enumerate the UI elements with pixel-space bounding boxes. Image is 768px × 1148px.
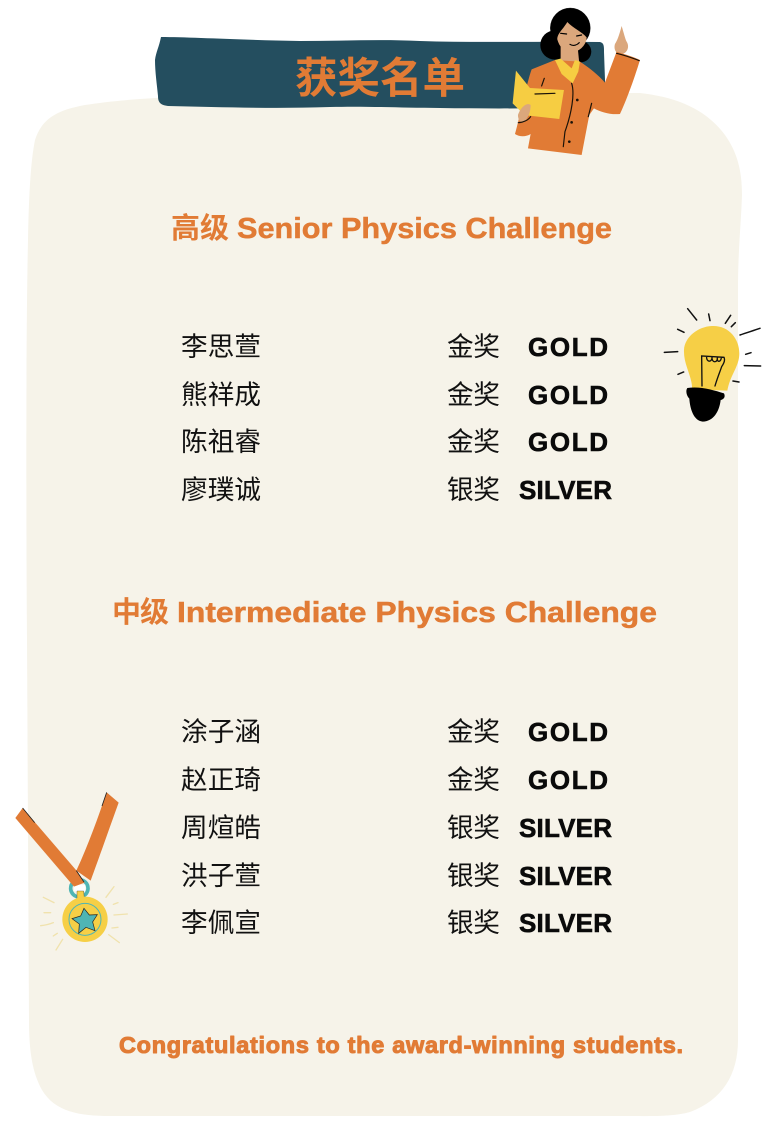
heading: award list: 获奖名单 bbox=[295, 56, 465, 103]
intermediate list awards: SILVER bbox=[519, 908, 612, 938]
heading: intermediate: 中级 bbox=[112, 596, 169, 629]
intermediate list awards: 银奖 bbox=[447, 861, 500, 891]
heading: intermediate: Intermediate Physics Challenge bbox=[177, 597, 657, 629]
senior list names: 李思萱 bbox=[181, 332, 261, 362]
icon: medal bbox=[15, 792, 127, 950]
senior list awards: GOLD bbox=[528, 380, 608, 410]
intermediate list names: 周煊皓 bbox=[181, 813, 261, 843]
intermediate list awards: SILVER bbox=[519, 813, 612, 843]
intermediate list awards: 金奖 bbox=[447, 765, 500, 795]
intermediate list awards: GOLD bbox=[528, 717, 608, 747]
intermediate list awards: 银奖 bbox=[447, 908, 500, 938]
intermediate list names: 洪子萱 bbox=[181, 861, 261, 891]
icon: teacher holding book bbox=[513, 8, 640, 155]
congratulations message: Congratulations to the award-winning students. bbox=[119, 1032, 683, 1058]
senior list awards: 银奖 bbox=[447, 475, 500, 505]
intermediate list names: 涂子涵 bbox=[181, 717, 261, 747]
intermediate list awards: 银奖 bbox=[447, 813, 500, 843]
intermediate list awards: SILVER bbox=[519, 861, 612, 891]
icon: light bulb bbox=[664, 309, 761, 422]
senior list names: 陈祖睿 bbox=[181, 427, 261, 457]
intermediate list awards: 金奖 bbox=[447, 717, 500, 747]
title banner bbox=[155, 37, 606, 108]
intermediate list names: 赵正琦 bbox=[181, 765, 261, 795]
senior list names: 廖璞诚 bbox=[181, 475, 261, 505]
senior list names bbox=[181, 332, 261, 505]
intermediate list awards: GOLD bbox=[528, 765, 608, 795]
intermediate list names: 李佩宣 bbox=[181, 908, 261, 938]
senior list awards: SILVER bbox=[519, 475, 612, 505]
senior list awards bbox=[447, 332, 612, 505]
intermediate list awards bbox=[447, 717, 612, 938]
senior list awards: GOLD bbox=[528, 332, 608, 362]
intermediate list names bbox=[181, 717, 261, 938]
senior list names: 熊祥成 bbox=[181, 380, 261, 410]
heading: senior: 高级 bbox=[171, 212, 229, 245]
heading: senior: Senior Physics Challenge bbox=[237, 213, 612, 245]
senior list awards: 金奖 bbox=[447, 380, 500, 410]
senior list awards: 金奖 bbox=[447, 427, 500, 457]
senior list awards: 金奖 bbox=[447, 332, 500, 362]
senior list awards: GOLD bbox=[528, 427, 608, 457]
